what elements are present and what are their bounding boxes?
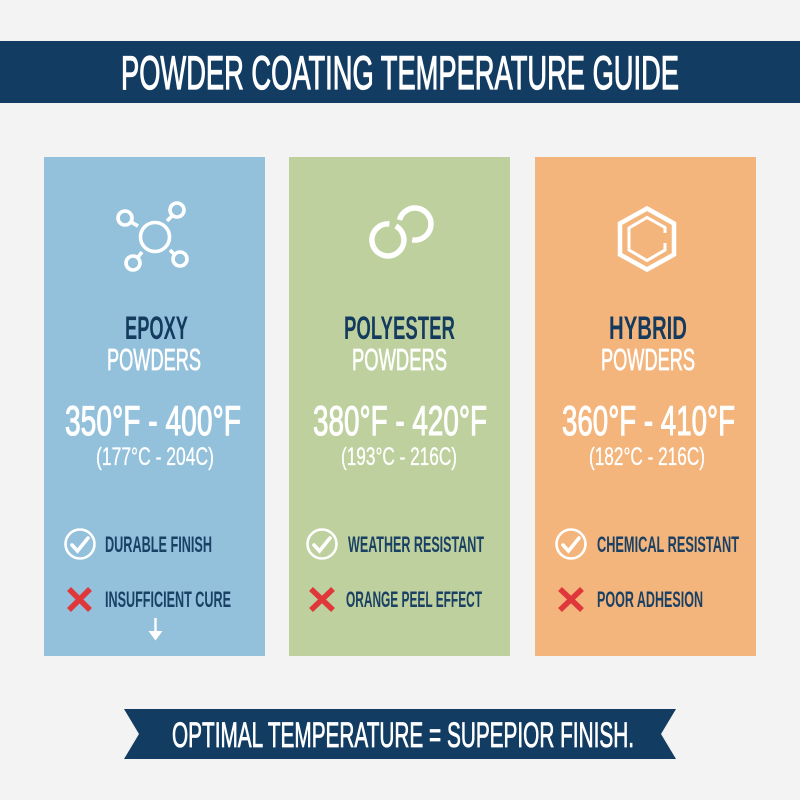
icon: check (66, 530, 94, 558)
temperature range celsius: (193°C - 216C) (341, 443, 457, 471)
icon: check (556, 530, 586, 558)
temperature range fahrenheit: 380°F - 420°F (313, 397, 487, 444)
temperature range celsius: (177°C - 204C) (96, 443, 214, 471)
risk label: POOR ADHESION (597, 587, 703, 612)
icon: cross (311, 589, 333, 610)
panel: hybrid powders (535, 157, 756, 656)
subheading: powders: POWDERS (107, 342, 201, 377)
subheading: powders: POWDERS (601, 342, 695, 377)
arrow: down (148, 618, 162, 640)
heading: polyester: POLYESTER (344, 310, 455, 346)
icon: molecule (118, 203, 187, 270)
icon: cross (560, 589, 582, 610)
panel: epoxy powders (44, 157, 265, 656)
heading: epoxy: EPOXY (125, 310, 188, 346)
title banner (0, 41, 800, 103)
temperature range celsius: (182°C - 216C) (589, 443, 705, 471)
icon: hexagon (620, 208, 674, 270)
risk label: INSUFFICIENT CURE (105, 587, 231, 612)
ribbon callout (124, 709, 676, 759)
heading: hybrid: HYBRID (609, 310, 687, 346)
icon: cross (69, 589, 90, 610)
panel: polyester powders (289, 157, 510, 656)
subheading: powders: POWDERS (352, 342, 447, 377)
benefit label: DURABLE FINISH (105, 532, 212, 557)
icon: check (308, 530, 336, 558)
temperature range fahrenheit: 350°F - 400°F (65, 397, 241, 444)
risk label: ORANGE PEEL EFFECT (346, 587, 482, 612)
icon: linked rings (372, 208, 431, 256)
benefit label: WEATHER RESISTANT (348, 532, 484, 557)
